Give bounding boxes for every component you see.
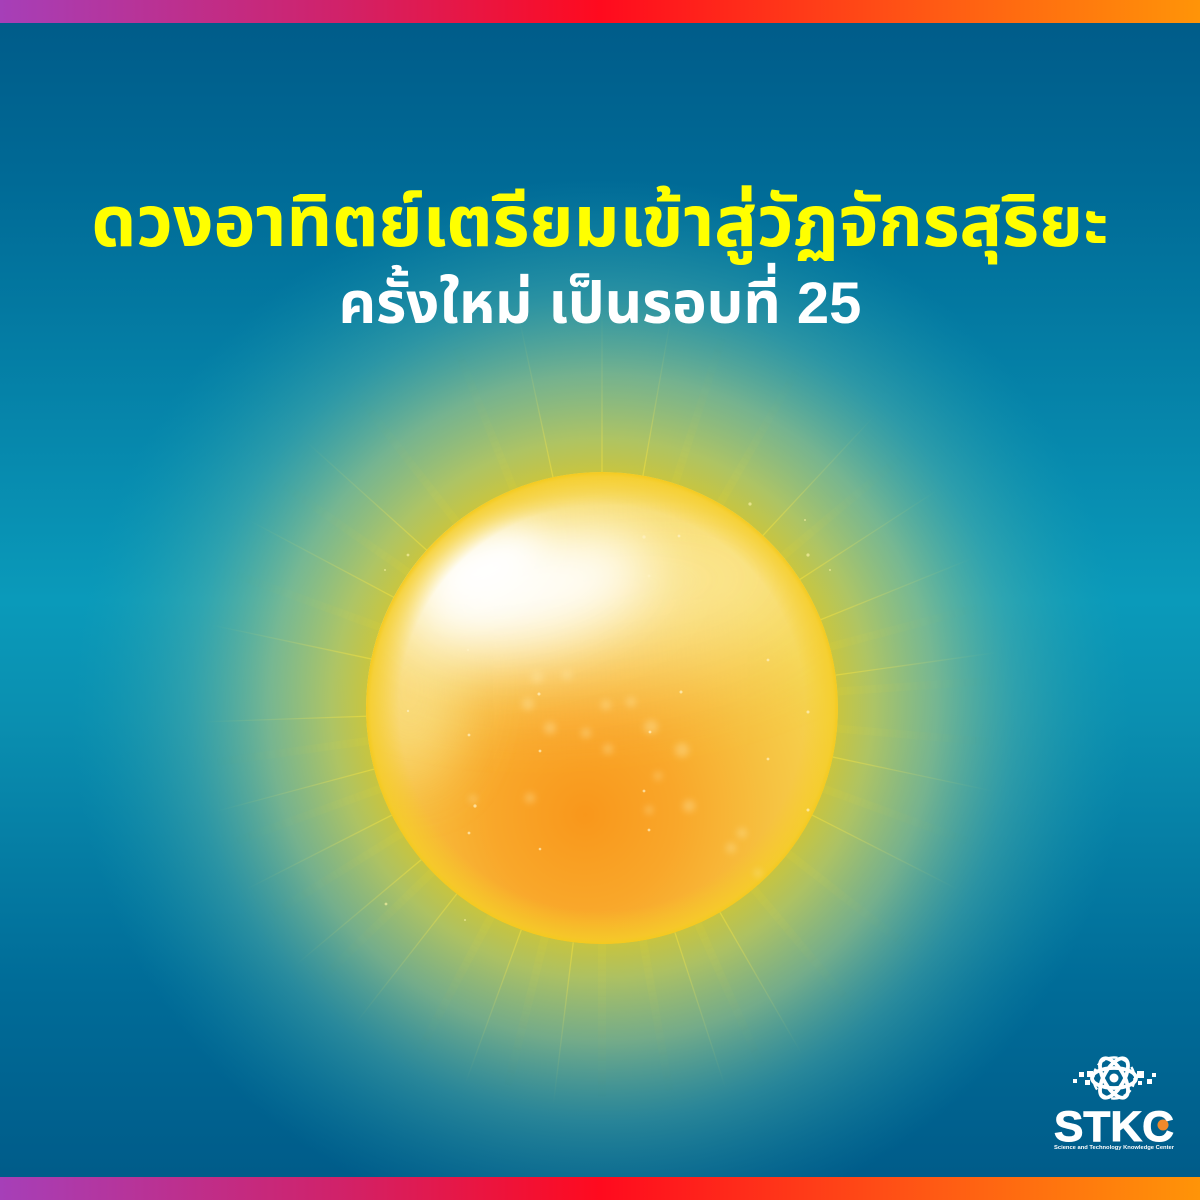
- icon: atom: [1092, 1054, 1136, 1102]
- STKC logo: [1054, 1056, 1174, 1151]
- bottom gradient bar: [0, 1177, 1200, 1200]
- surface speckles: [469, 670, 762, 877]
- pale left side glow on disc: [360, 600, 460, 780]
- disc rim: [366, 472, 838, 944]
- sun disc: [360, 472, 838, 944]
- sun rays: [202, 308, 1001, 1108]
- sun glow: [72, 178, 1132, 1200]
- logo wordmark: STKC: [1054, 1103, 1174, 1151]
- title: yellow headline: ดวงอาทิตย์เตรียมเข้าสู่วัฏจักรสุริยะ: [91, 183, 1109, 262]
- pale upper glow on disc: [369, 495, 831, 685]
- icon: pixel squares: [1073, 1071, 1156, 1085]
- white highlight: [386, 509, 664, 671]
- top gradient bar: [0, 0, 1200, 23]
- sparkles outside disc: [384, 502, 831, 921]
- logo orange dot: [1158, 1120, 1168, 1130]
- sun illustration with glow and rays: [120, 218, 1085, 1177]
- logo tagline: Science and Technology Knowledge Center: [1054, 1145, 1174, 1151]
- subtitle: white headline: ครั้งใหม่ เป็นรอบที่ 25: [339, 271, 861, 336]
